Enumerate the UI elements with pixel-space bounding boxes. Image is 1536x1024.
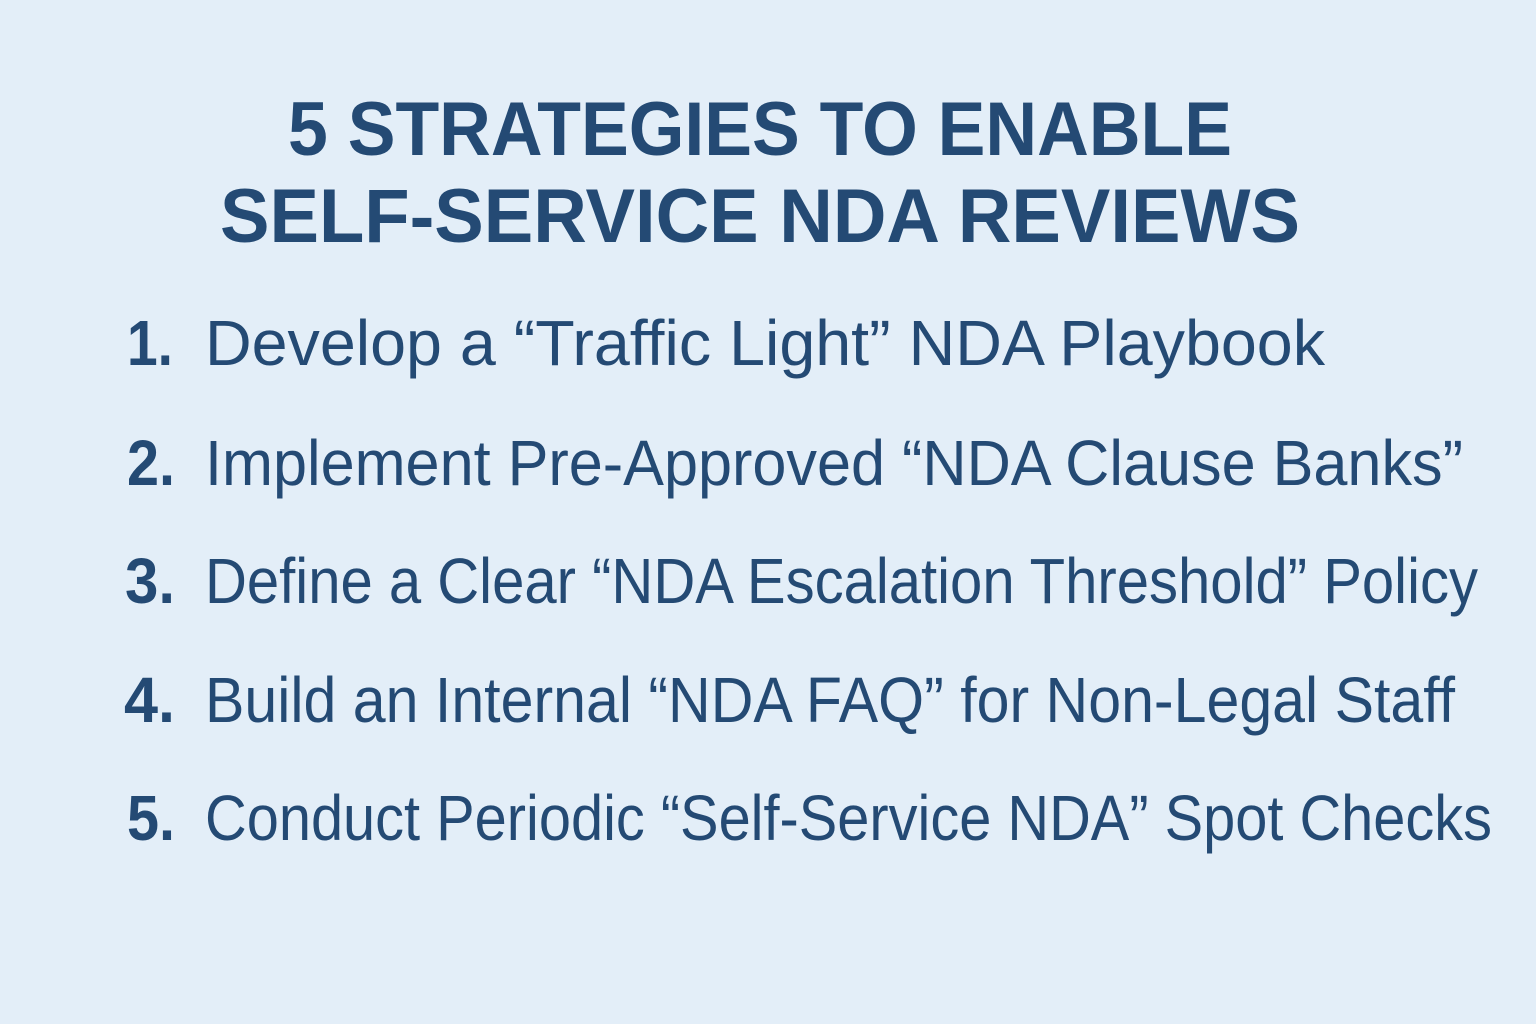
item 5: 5. — [127, 782, 175, 854]
item 4: Build an Internal “NDA FAQ” for Non-Legal Staff — [205, 664, 1455, 736]
title — [220, 87, 1300, 259]
strategy list — [124, 307, 1492, 854]
item 2: 2. — [127, 427, 175, 499]
item 1: Develop a “Traffic Light” NDA Playbook — [205, 307, 1326, 379]
item 4: 4. — [124, 664, 175, 736]
title: 5 STRATEGIES TO ENABLE — [288, 87, 1232, 172]
item 1: 1. — [127, 307, 173, 379]
title: SELF-SERVICE NDA REVIEWS — [220, 174, 1300, 259]
item 2: Implement Pre-Approved “NDA Clause Banks” — [205, 427, 1463, 499]
item 3: 3. — [125, 545, 175, 617]
